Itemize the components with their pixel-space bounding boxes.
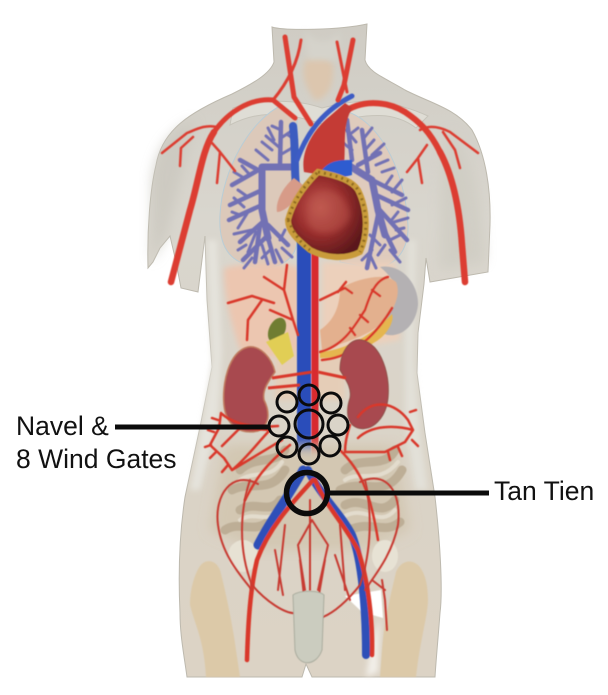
leader line: navel bbox=[115, 424, 270, 430]
left subclavian artery bbox=[214, 100, 295, 132]
iliac arteries bbox=[247, 480, 313, 660]
aorta and vena cava bbox=[293, 96, 352, 485]
gallbladder bbox=[264, 315, 290, 345]
intestines bbox=[210, 445, 410, 550]
pancreas bbox=[320, 314, 393, 358]
abdominal arteries bbox=[205, 405, 418, 540]
label: tan tien: Tan Tien bbox=[494, 476, 594, 506]
right bronchial tree bbox=[342, 120, 408, 268]
arm branches bbox=[162, 126, 235, 183]
abdominal organs background bbox=[224, 262, 400, 400]
stomach bbox=[320, 277, 398, 350]
tan tien circle bbox=[286, 472, 328, 514]
left arcade bbox=[210, 413, 290, 500]
stomach and liver arteries bbox=[228, 265, 398, 365]
left kidney bbox=[224, 347, 275, 432]
navel circle bbox=[295, 410, 323, 438]
pelvic arteries bbox=[217, 479, 399, 630]
right kidney bbox=[340, 340, 388, 429]
wind gates bbox=[299, 385, 319, 405]
left bronchial tree bbox=[229, 122, 296, 268]
aortic arch bbox=[303, 103, 352, 175]
pulmonary artery bbox=[322, 160, 352, 177]
spleen bbox=[380, 267, 418, 335]
leader line: tan tien bbox=[330, 490, 489, 496]
heart muscle bbox=[288, 172, 366, 257]
lungs bbox=[220, 105, 408, 268]
iliac vessels bbox=[247, 470, 372, 660]
iliac wing and hip bones bbox=[190, 540, 428, 677]
kidneys bbox=[224, 340, 388, 432]
carotid arteries bbox=[285, 37, 311, 124]
vena cava bbox=[293, 126, 296, 185]
renal arteries bbox=[268, 372, 346, 388]
organ arteries bbox=[228, 265, 392, 360]
neck and arm arteries bbox=[162, 37, 478, 282]
body silhouette bbox=[148, 24, 490, 677]
label: navel and 8 wind gates: Navel & bbox=[16, 411, 109, 441]
abdominal aorta bbox=[312, 250, 318, 485]
navel and wind gate circles bbox=[269, 385, 348, 464]
iliac veins bbox=[258, 470, 303, 545]
right atrium bbox=[277, 178, 303, 212]
right subclavian artery bbox=[343, 103, 440, 152]
label: navel and 8 wind gates: 8 Wind Gates bbox=[16, 444, 177, 474]
right arcade bbox=[340, 405, 413, 540]
scrotum bbox=[293, 591, 324, 663]
heart bbox=[277, 103, 366, 257]
